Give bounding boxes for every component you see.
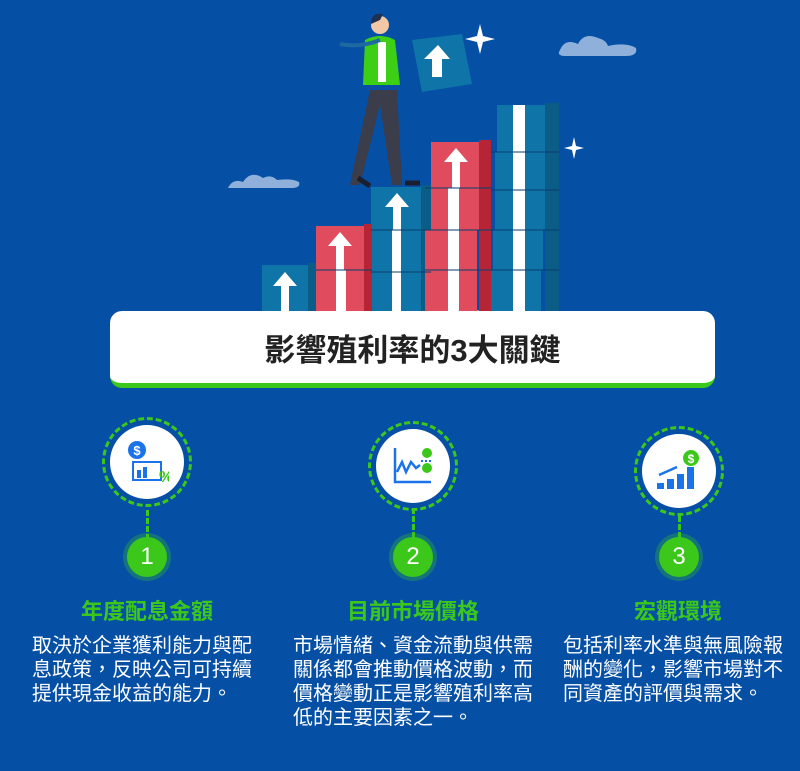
boxes xyxy=(262,103,559,313)
heading: 宏觀環境 xyxy=(634,599,722,624)
column 1 xyxy=(32,417,252,705)
number 2 xyxy=(393,537,433,577)
number 3: 3 xyxy=(672,543,686,570)
number 3 xyxy=(659,537,699,577)
column 3 xyxy=(563,426,783,705)
title: 影響殖利率的3大關鍵 xyxy=(264,333,561,368)
clouds xyxy=(226,36,636,188)
title xyxy=(110,311,715,388)
number 1 xyxy=(127,537,167,577)
icon: dividend chart xyxy=(102,417,192,507)
column 2 xyxy=(293,421,533,729)
heading: 年度配息金額 xyxy=(81,599,213,624)
icon: price chart xyxy=(368,421,458,511)
man xyxy=(340,14,472,186)
icon: growth bars: $ xyxy=(688,452,695,466)
body text: 取決於企業獲利能力與配息政策，反映公司可持續提供現金收益的能力。 xyxy=(32,635,252,705)
heading: 目前市場價格 xyxy=(347,599,479,624)
icon: growth bars xyxy=(634,426,724,516)
illustration: climbing boxes xyxy=(228,14,636,311)
body text: 市場情緒、資金流動與供需關係都會推動價格波動，而價格變動正是影響殖利率高低的主要因素之一。 xyxy=(293,635,533,729)
icon: dividend chart: $ xyxy=(133,443,141,458)
sparkles xyxy=(465,24,584,159)
number 2: 2 xyxy=(406,543,420,570)
number 1: 1 xyxy=(140,543,154,570)
body text: 包括利率水準與無風險報酬的變化，影響市場對不同資產的評價與需求。 xyxy=(563,635,783,705)
